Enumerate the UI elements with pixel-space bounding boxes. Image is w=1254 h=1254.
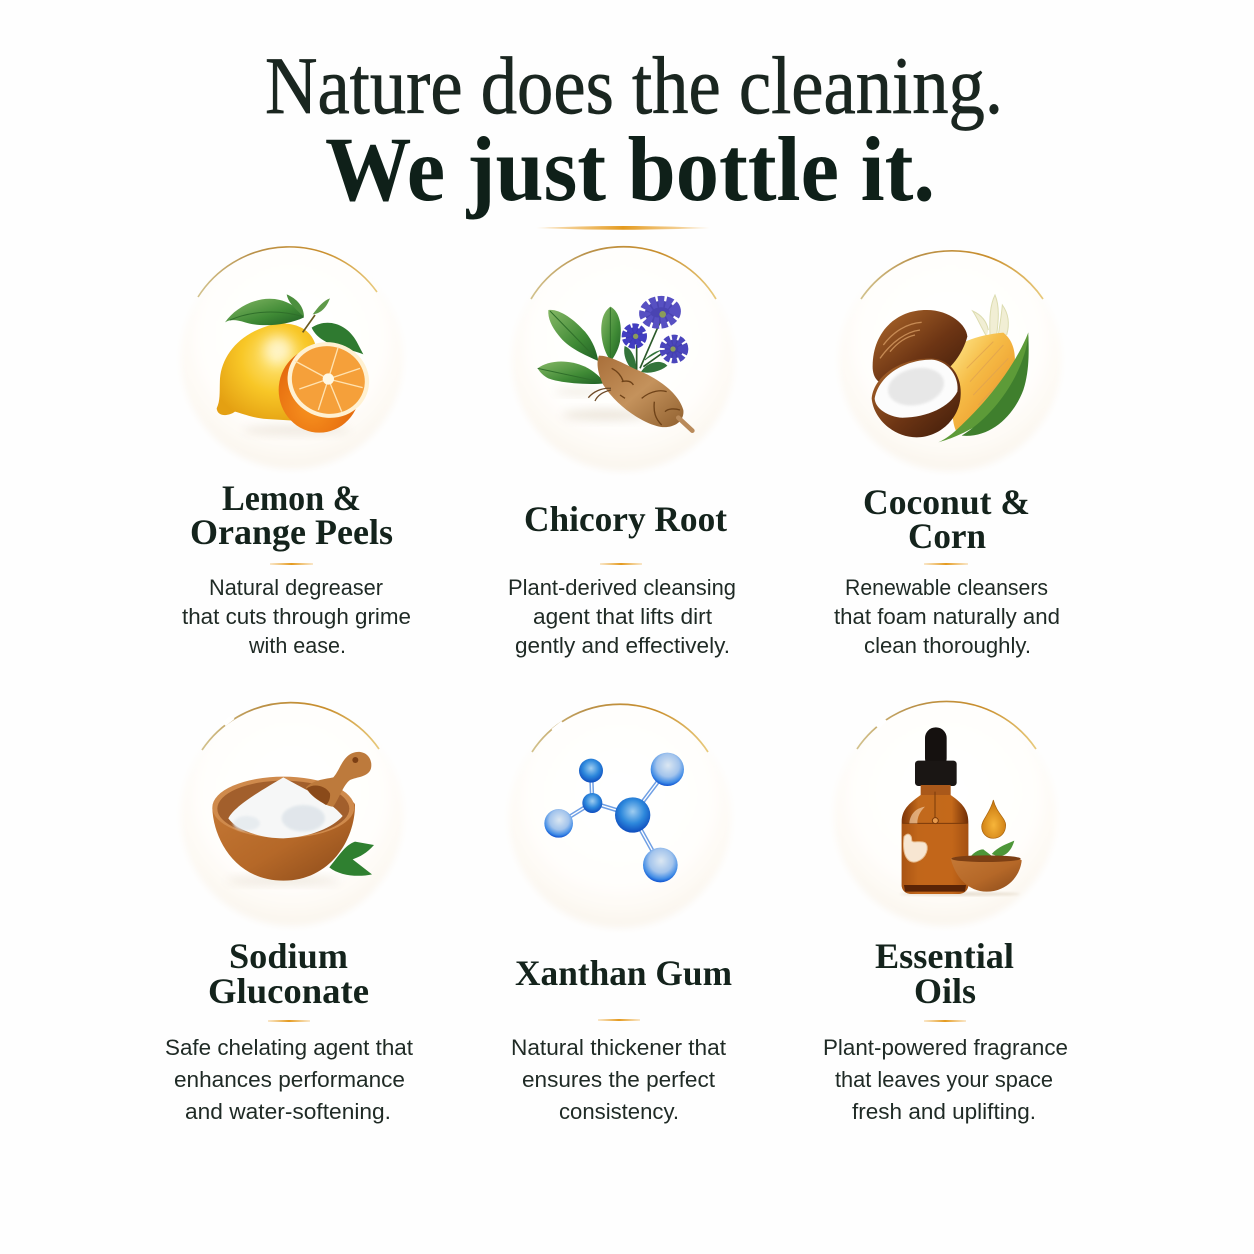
body text: chicory: agent that lifts dirt — [533, 604, 712, 629]
body text: essential oils: that leaves your space — [835, 1067, 1053, 1092]
body text: sodium — [165, 1035, 413, 1124]
gold arc — [531, 247, 716, 299]
title — [265, 40, 1003, 220]
divider — [268, 1020, 310, 1022]
panel: lemon and orange peels — [181, 247, 403, 469]
icon: chicory root with flowers — [538, 299, 692, 431]
divider — [600, 563, 642, 565]
gold arc — [861, 251, 1043, 299]
panel heading: Xanthan Gum: Xanthan Gum — [515, 953, 732, 993]
body text: coconut: Renewable cleansers — [845, 575, 1048, 600]
divider — [924, 1020, 966, 1022]
body text: essential oils: Plant-powered fragrance — [823, 1035, 1068, 1060]
circle backdrop — [834, 704, 1056, 926]
gold arc — [202, 703, 379, 750]
icon: dropper bottle with oil drop and bowl — [900, 727, 1022, 896]
panel heading: Coconut & Corn: Corn — [908, 516, 986, 556]
panel heading: Essential Oils: Essential — [875, 936, 1014, 976]
body text: lemon: that cuts through grime — [182, 604, 411, 629]
divider — [598, 1019, 640, 1021]
panel heading: Coconut & Corn: Coconut & — [863, 482, 1030, 522]
gold arc — [857, 701, 1036, 749]
panel heading: Lemon & Orange Peels — [190, 478, 393, 552]
panel heading: Lemon & Orange Peels: Orange Peels — [190, 512, 393, 552]
body text: lemon — [182, 575, 411, 658]
panel: coconut and corn — [839, 249, 1061, 471]
panel: xanthan gum — [509, 704, 731, 928]
body text: sodium: enhances performance — [174, 1067, 405, 1092]
panel heading: Essential Oils: Oils — [914, 971, 976, 1011]
panel: sodium gluconate — [181, 703, 403, 926]
body text: lemon: Natural degreaser — [209, 575, 383, 600]
body text: xanthan: consistency. — [559, 1099, 679, 1124]
panel: chicory root — [512, 247, 734, 471]
circle backdrop — [181, 704, 403, 926]
body text: xanthan: ensures the perfect — [522, 1067, 715, 1092]
body text: xanthan: Natural thickener that — [511, 1035, 726, 1060]
panel heading: Sodium Gluconate: Sodium — [229, 936, 348, 976]
panel heading: Chicory Root: Chicory Root — [524, 499, 727, 539]
body text: chicory — [508, 575, 736, 658]
body text: coconut — [834, 575, 1060, 658]
body text: essential oils — [823, 1035, 1068, 1124]
gold arc — [198, 247, 377, 297]
body text: sodium: Safe chelating agent that — [165, 1035, 413, 1060]
circle backdrop — [509, 706, 731, 928]
icon: coconut and corn — [872, 295, 1029, 442]
panel heading: Sodium Gluconate: Gluconate — [208, 971, 369, 1011]
panel heading: Sodium Gluconate — [208, 936, 369, 1011]
icon: molecule — [544, 753, 684, 882]
body text: sodium: and water-softening. — [185, 1099, 391, 1124]
body text: chicory: gently and effectively. — [515, 633, 730, 658]
panel: essential oils — [834, 701, 1056, 926]
title: We just bottle it. — [325, 118, 935, 220]
gold arc — [532, 704, 708, 752]
circle backdrop — [512, 249, 734, 471]
icon: lemon and orange — [217, 294, 378, 435]
body text: essential oils: fresh and uplifting. — [852, 1099, 1036, 1124]
divider — [270, 563, 313, 565]
body text: lemon: with ease. — [248, 633, 346, 658]
title underline — [536, 226, 710, 230]
title: Nature does the cleaning. — [265, 40, 1003, 131]
divider — [924, 563, 968, 565]
body text: coconut: that foam naturally and — [834, 604, 1060, 629]
panel heading: Coconut & Corn — [863, 482, 1030, 556]
body text: chicory: Plant-derived cleansing — [508, 575, 736, 600]
panel heading: Essential Oils — [875, 936, 1014, 1011]
panel heading: Lemon & Orange Peels: Lemon & — [222, 478, 361, 518]
icon: wooden bowl of powder with scoop — [212, 752, 374, 885]
circle backdrop — [839, 249, 1061, 471]
body text: coconut: clean thoroughly. — [864, 633, 1031, 658]
circle backdrop — [181, 247, 403, 469]
body text: xanthan — [511, 1035, 726, 1124]
